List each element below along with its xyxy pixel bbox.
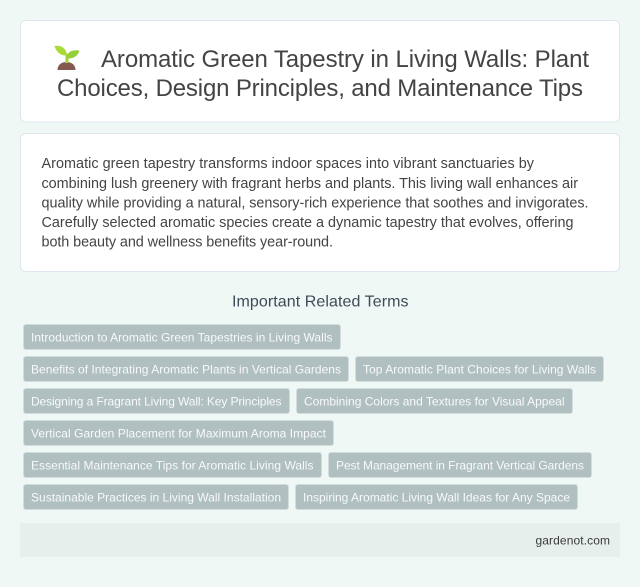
tag: pest management: Pest Management in Fragrant Vertical Gardens [336,458,584,472]
text block: description: both beauty and wellness benefits year-round. [42,234,333,250]
tag: benefits [24,356,348,382]
icon: seedling [54,46,80,70]
heading: title: Choices, Design Principles, and Maintenance Tips [57,75,583,102]
heading: title [57,46,589,102]
tag: introduction [24,324,340,350]
tag: placement: Vertical Garden Placement for Maximum Aroma Impact [31,426,327,440]
heading: important related terms: Important Related Terms [232,294,408,310]
footer [20,523,620,557]
tag: top plant choices: Top Aromatic Plant Choices for Living Walls [363,362,596,376]
tag: designing: Designing a Fragrant Living Wall: Key Principles [31,394,282,408]
text block: description: quality while providing a natural, sensory-rich experience that soothes and invigorates. [42,196,588,212]
tag: sustainable [24,484,288,510]
text block: description: Carefully selected aromatic species create a dynamic tapestry that evolves, offering [42,215,574,231]
tag: maintenance [24,452,322,478]
tag: designing [24,388,290,414]
panel: title card [20,20,620,122]
tag: sustainable: Sustainable Practices in Living Wall Installation [31,490,281,504]
text block: description: combining lush greenery with fragrant herbs and plants. This living wall enhances air [42,176,578,192]
tag: top plant choices [356,356,604,382]
heading: title: Aromatic Green Tapestry in Living Walls: Plant [101,46,589,73]
text block: description: Aromatic green tapestry transforms indoor spaces into vibrant sanctuaries by [42,156,535,172]
tag: inspiring: Inspiring Aromatic Living Wall Ideas for Any Space [303,490,570,504]
tag: maintenance: Essential Maintenance Tips for Aromatic Living Walls [31,458,314,472]
panel: description card [20,134,620,272]
footer: gardenot.com [536,534,610,548]
tag: inspiring [296,484,578,510]
tag: placement [24,420,334,446]
tag: pest management [328,452,592,478]
tag: colors and textures: Combining Colors and Textures for Visual Appeal [304,394,564,408]
tag: colors and textures [296,388,572,414]
tag: benefits: Benefits of Integrating Aromatic Plants in Vertical Gardens [31,362,341,376]
text block: description [42,156,588,250]
tag: introduction: Introduction to Aromatic Green Tapestries in Living Walls [31,330,332,344]
